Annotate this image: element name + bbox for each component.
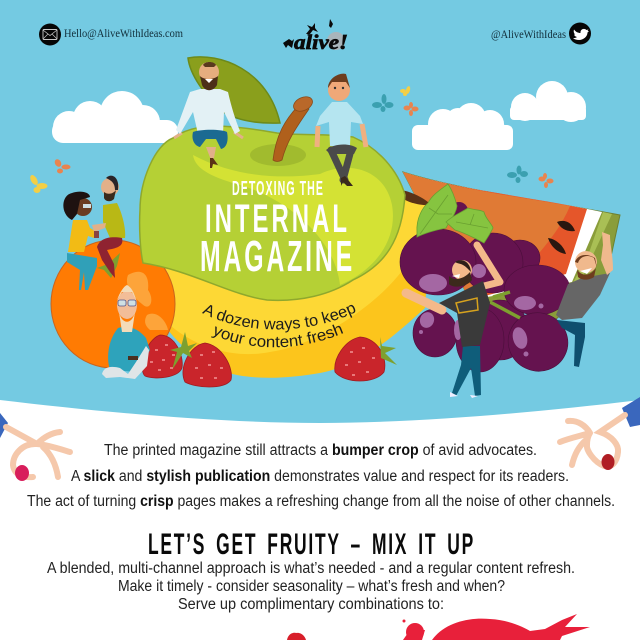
stem shadow	[250, 144, 306, 166]
title: DETOXING THE	[232, 178, 324, 200]
header: twitter contact	[491, 22, 591, 44]
subtitle	[202, 304, 356, 348]
orange	[51, 240, 175, 368]
apple highlight	[193, 155, 393, 285]
intro text: The printed magazine still attracts a bumper crop of avid advocates.	[104, 442, 537, 459]
cloud: centre right	[412, 103, 513, 150]
section text: Serve up complimentary combinations to:	[178, 596, 444, 613]
butterfly: yellow left	[29, 174, 48, 193]
hand: right with berry	[560, 397, 640, 470]
apple leaf	[188, 57, 280, 123]
sky background	[0, 0, 640, 425]
apple stem	[273, 106, 309, 162]
header: Alive logo: alive!	[294, 30, 348, 54]
banana tips	[400, 190, 431, 205]
red juice splats	[287, 614, 590, 640]
character: man holding grapes	[406, 245, 500, 398]
strawberries	[142, 332, 397, 387]
title	[200, 178, 355, 281]
section text: A blended, multi-channel approach is what’s needed - and a regular content refresh.	[47, 560, 575, 577]
subtitle: your content fresh	[211, 324, 344, 348]
intro text: A slick and stylish publication demonstrates value and respect for its readers.	[71, 468, 569, 485]
section text: Make it timely - consider seasonality – what’s fresh and when?	[118, 578, 505, 595]
character: woman on orange	[63, 192, 97, 290]
section text	[47, 560, 575, 613]
title: MAGAZINE	[200, 232, 355, 281]
small top grape	[450, 202, 468, 220]
header: Alive logo	[283, 19, 348, 54]
strawberry leaves	[170, 332, 197, 370]
apple	[140, 94, 405, 300]
white lower panel	[0, 400, 640, 640]
butterfly: yellow top	[400, 86, 411, 96]
grape leaves	[417, 184, 493, 243]
butterfly: teal right	[507, 166, 528, 183]
header: email contact	[39, 24, 183, 46]
subtitle: A dozen ways to keep	[202, 304, 356, 332]
raspberry	[15, 465, 29, 481]
intro text	[27, 442, 615, 510]
header: email contact: Hello@AliveWithIdeas.com	[64, 28, 183, 40]
grape bunch	[400, 229, 577, 381]
butterfly: orange top	[404, 102, 418, 116]
butterfly: orange right	[538, 173, 554, 188]
butterfly: orange left	[53, 158, 70, 174]
title: INTERNAL	[205, 197, 350, 241]
hand: left with raspberry	[0, 413, 70, 481]
character: older man seated	[102, 285, 150, 379]
header: twitter contact: @AliveWithIdeas	[491, 29, 566, 41]
cloud: far right	[510, 81, 586, 122]
berry	[602, 454, 614, 470]
banana	[140, 190, 432, 378]
watermelon slice	[403, 172, 620, 320]
orange stem star	[97, 253, 120, 278]
character: man on orange	[92, 176, 125, 278]
grape stems	[490, 292, 520, 318]
butterfly: teal top	[372, 94, 394, 112]
character: bearded man on apple	[174, 62, 243, 168]
character: man holding watermelon	[556, 232, 613, 367]
strawberry seeds	[150, 345, 375, 378]
grape highlights	[418, 264, 544, 356]
character: man in blue shirt on apple	[316, 74, 366, 186]
cloud: left	[52, 91, 178, 143]
watermelon seeds	[548, 221, 575, 254]
